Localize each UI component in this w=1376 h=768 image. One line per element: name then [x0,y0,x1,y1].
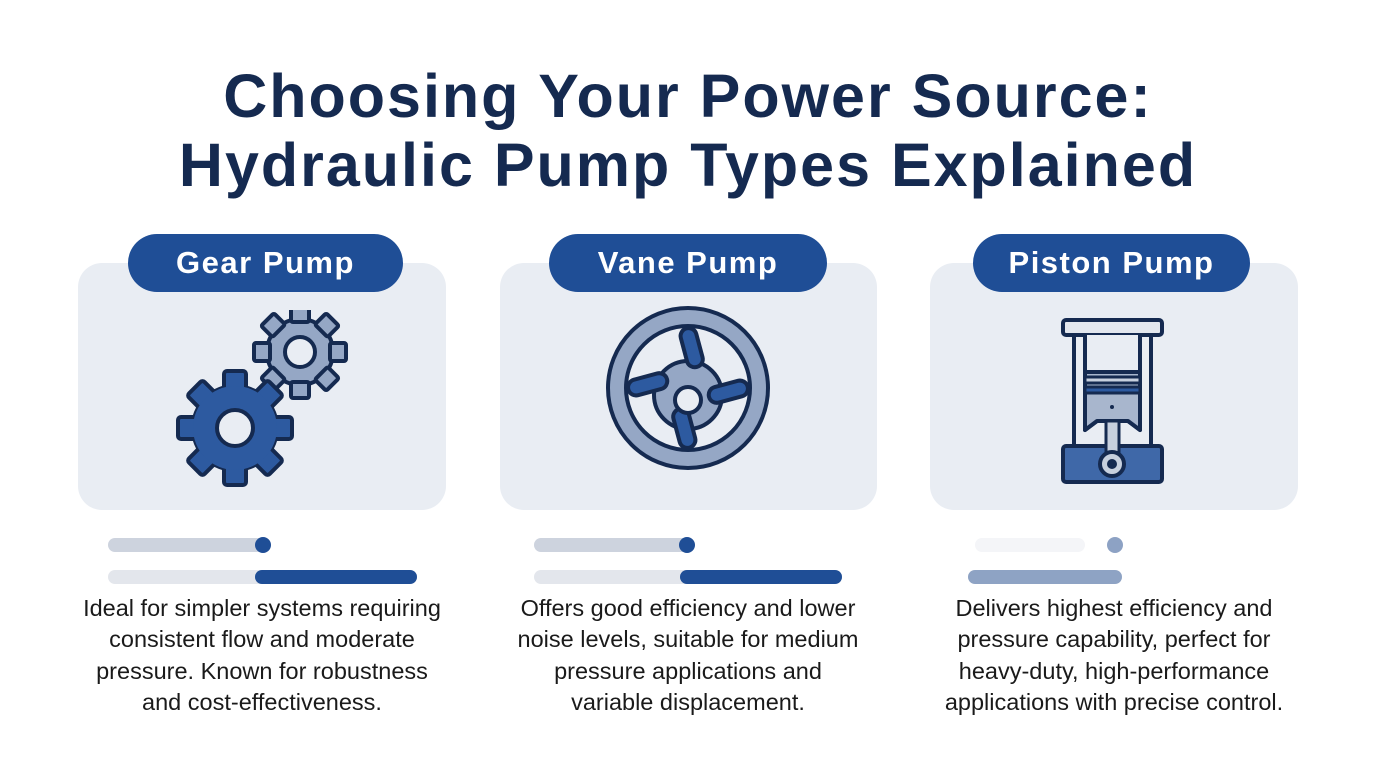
rating bars: piston [968,537,1123,584]
text: piston: applications with precise control. [945,689,1283,715]
text: gear [83,595,441,715]
heading: piston pump [973,234,1250,292]
panel: piston pump [930,263,1298,510]
rating bars: vane [534,537,842,584]
text: piston: pressure capability, perfect for [957,626,1271,652]
text: gear: Ideal for simpler systems requiring [83,595,441,621]
rating bars: gear [108,537,417,584]
panel: gear pump [78,263,446,510]
text: piston: Delivers highest efficiency and [956,595,1272,621]
panel: vane pump [500,263,877,510]
text: vane: variable displacement. [571,689,805,715]
text: vane [518,595,858,715]
text: vane: noise levels, suitable for medium [518,626,858,652]
title: Hydraulic Pump Types Explained [179,131,1197,199]
title [179,62,1197,199]
text: vane: Offers good efficiency and lower [521,595,855,621]
text: piston: heavy-duty, high-performance [959,658,1269,684]
text: gear: and cost-effectiveness. [142,689,382,715]
heading: gear pump: Gear Pump [176,245,355,280]
icon: piston [1061,318,1164,484]
heading: vane pump: Vane Pump [598,245,778,280]
text: gear: pressure. Known for robustness [96,658,428,684]
heading: gear pump [128,234,403,292]
icon: vane rotor [606,306,770,470]
text: piston [945,595,1283,715]
text: vane: pressure applications and [554,658,822,684]
icon: gears [176,310,348,487]
heading: piston pump: Piston Pump [1009,245,1214,280]
text: gear: consistent flow and moderate [109,626,415,652]
title: Choosing Your Power Source: [223,62,1153,130]
heading: vane pump [549,234,827,292]
